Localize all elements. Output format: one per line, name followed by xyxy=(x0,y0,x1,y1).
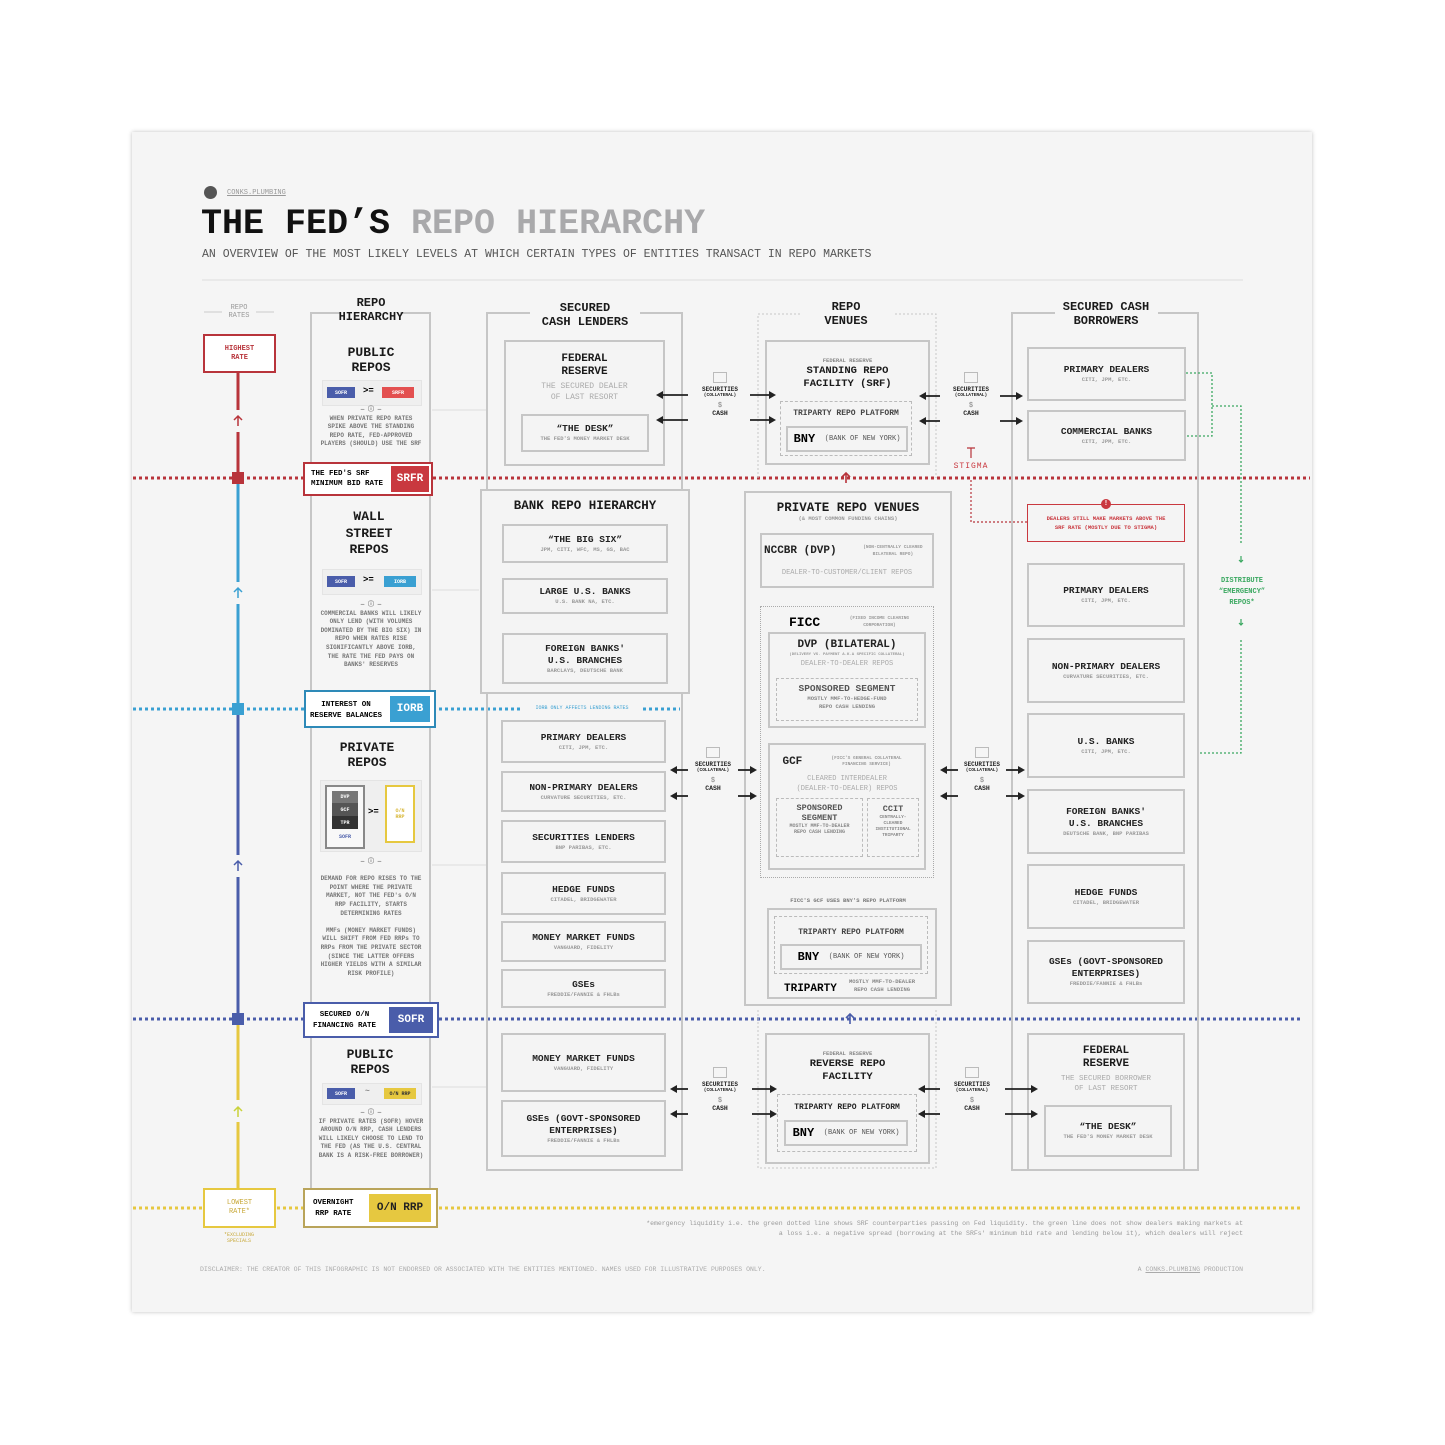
chips stack: GCF xyxy=(340,806,350,812)
GCF to BNY connector xyxy=(846,866,850,920)
disclaimer: DISCLAIMER: THE CREATOR OF THIS INFOGRAPHIC IS NOT ENDORSED OR ASSOCIATED WITH THE ENTITIES MENTIONED. NAMES USED FOR ILLUSTRATIVE PURPOSES ONLY. xyxy=(200,1266,766,1273)
bank repo hierarchy panel: LARGE U.S. BANKS xyxy=(539,586,631,597)
borrowers list: OF LAST RESORT xyxy=(1074,1085,1138,1093)
IORB note: IORB ONLY AFFECTS LENDING RATES xyxy=(535,705,628,711)
rate box: IORB: IORB xyxy=(397,703,423,715)
note private repos: DEMAND FOR REPO RISES TO THE POINT WHERE THE PRIVATE MARKET, NOT THE FED's O/N RRP FACILITY, STARTS DETERMINING RATES xyxy=(321,875,421,917)
lenders list: ENTERPRISES) xyxy=(549,1124,618,1136)
triparty: BNY xyxy=(798,950,819,964)
lender: federal reserve xyxy=(504,340,665,466)
wall street repos: WALL xyxy=(353,509,385,524)
chips SOFR >= SRFR xyxy=(322,380,422,406)
bank repo hierarchy panel xyxy=(480,489,690,694)
chips stack: TPR xyxy=(340,820,350,826)
borrowers list: RESERVE xyxy=(1083,1058,1129,1070)
secured cash borrowers heading: BORROWERS xyxy=(1074,314,1138,328)
wall street repos: STREET xyxy=(346,526,392,540)
borrowers list: CURVATURE SECURITIES, ETC. xyxy=(1063,672,1149,680)
text: $ xyxy=(980,777,984,785)
FICC: MOSTLY MMF-TO-HEDGE-FUND xyxy=(807,695,887,702)
highest rate box xyxy=(203,334,276,373)
triparty: (BANK OF NEW YORK) xyxy=(829,953,904,961)
venue: SRF: (BANK OF NEW YORK) xyxy=(825,435,900,443)
private repo venues panel xyxy=(744,491,952,1006)
public repos bottom: PUBLIC xyxy=(347,1047,393,1062)
distribute emergency repos label: “EMERGENCY” xyxy=(1219,588,1265,596)
lenders list: VANGUARD, FIDELITY xyxy=(554,1064,613,1072)
FICC: REPO CASH LENDING xyxy=(794,829,845,835)
FICC: TRIPARTY xyxy=(882,833,904,838)
heading xyxy=(339,296,404,324)
lowest rate box: RATE* xyxy=(229,1208,250,1216)
note private repos: MMFs (MONEY MARKET FUNDS) WILL SHIFT FROM FED RRPs TO RRPs FROM THE PRIVATE SECTOR (SINCE THE LATTER OFFERS HIGHER YIELDS WITH A SIMILAR RISK PROFILE) xyxy=(321,927,421,977)
rate axis xyxy=(232,372,244,1188)
secured cash borrowers heading: SECURED CASH xyxy=(1063,300,1149,314)
FICC: GCF xyxy=(782,756,802,768)
bank repo hierarchy panel: FOREIGN BANKS' xyxy=(545,642,625,654)
rate box: SOFR: SOFR xyxy=(398,1014,424,1026)
header: logo xyxy=(204,186,286,199)
distribute emergency repos label: REPOS* xyxy=(1229,599,1255,607)
bank repo hierarchy panel: U.S. BRANCHES xyxy=(548,654,622,666)
column outlines xyxy=(311,313,1198,1190)
text: CASH xyxy=(712,1105,728,1112)
faint connectors xyxy=(432,410,486,1087)
lenders list: CURVATURE SECURITIES, ETC. xyxy=(541,794,626,800)
wall street repos: REPOS xyxy=(349,542,388,557)
repo hierarchy column xyxy=(318,296,424,1159)
chips SOFR ~ RRP: O/N RRP xyxy=(389,1090,410,1096)
text: (COLLATERAL) xyxy=(956,1088,988,1093)
borrowers list: CITI, JPM, ETC. xyxy=(1082,376,1131,383)
distribute emergency repos label: DISTRIBUTE xyxy=(1221,577,1263,585)
private repo venues panel: FICC'S GCF USES BNY'S REPO PLATFORM xyxy=(790,897,906,904)
rate box: O/N RRP: OVERNIGHT xyxy=(313,1199,354,1207)
header: logo: CONKS.PLUMBING xyxy=(227,189,286,197)
text: $ xyxy=(970,1097,974,1105)
FICC: REPO CASH LENDING xyxy=(819,703,875,710)
borrowers list: FOREIGN BANKS' xyxy=(1066,806,1146,816)
lenders list: VANGUARD, FIDELITY xyxy=(554,944,613,950)
FICC: (FIXED INCOME CLEARING CORPORATION) xyxy=(850,616,909,628)
public repos top xyxy=(348,345,394,375)
private repo venues panel: PRIVATE REPO VENUES xyxy=(777,501,919,515)
FICC: CENTRALLY- xyxy=(879,815,906,820)
text: (COLLATERAL) xyxy=(955,393,987,398)
venue: SRF: STANDING REPO xyxy=(807,365,888,377)
FICC: (DEALER-TO-DEALER) REPOS xyxy=(797,785,897,793)
text: CASH xyxy=(964,1105,980,1112)
FICC: CCIT xyxy=(883,804,903,814)
O/N RRP line xyxy=(133,1206,1300,1210)
lender: federal reserve: “THE DESK” xyxy=(556,423,614,434)
borrowers list: ENTERPRISES) xyxy=(1072,968,1140,979)
distribute emergency repos label xyxy=(1219,577,1265,607)
highest rate box: HIGHEST xyxy=(225,344,254,352)
NCCBR: (NON-CENTRALLY CLEARED BILATERAL REPO) xyxy=(863,545,923,557)
rate box: O/N RRP: RRP RATE xyxy=(315,1210,351,1218)
subtitle: AN OVERVIEW OF THE MOST LIKELY LEVELS AT WHICH CERTAIN TYPES OF ENTITIES TRANSACT IN REPO MARKETS xyxy=(202,248,871,261)
rate box: O/N RRP xyxy=(303,1188,438,1228)
SOFR line xyxy=(133,1018,1300,1020)
FICC: FICC xyxy=(789,614,820,630)
note wall street: COMMERCIAL BANKS WILL LIKELY ONLY LEND (WITH VOLUMES DOMINATED BY THE BIG SIX) IN REPO WHEN RATES RISE SIGNIFICANTLY ABOVE IORB, THE RATE THE FED PAYS ON BANKS' RESERVES xyxy=(321,610,421,668)
borrowers list: DEUTSCHE BANK, BNP PARIBAS xyxy=(1063,830,1149,836)
rate box: SRFR xyxy=(303,462,433,496)
rate box: SRFR: MINIMUM BID RATE xyxy=(311,480,383,488)
chips stack: >= xyxy=(368,807,379,817)
rate box: SRFR: THE FED'S SRF xyxy=(311,470,370,478)
venue: SRF xyxy=(765,340,930,465)
lenders list: GSEs xyxy=(572,978,595,990)
note private repos: — ⓘ — xyxy=(361,858,381,865)
text: SECURITIES xyxy=(954,1081,990,1088)
bank repo hierarchy panel: BANK REPO HIERARCHY xyxy=(514,499,656,513)
chips SOFR ~ RRP: ~ xyxy=(365,1087,370,1096)
public repos bottom: REPOS xyxy=(350,1062,390,1077)
chips SOFR >= IORB: >= xyxy=(363,575,374,585)
borrowers list: U.S. BANKS xyxy=(1077,736,1134,746)
rate column header xyxy=(228,304,250,320)
secured cash lenders heading xyxy=(542,301,628,329)
lenders list: CITADEL, BRIDGEWATER xyxy=(550,896,616,902)
rate box: SOFR: FINANCING RATE xyxy=(313,1022,376,1030)
borrowers list xyxy=(1027,347,1186,1169)
highest rate box: RATE xyxy=(231,354,248,362)
private repo venues panel: (& MOST COMMON FUNDING CHAINS) xyxy=(798,515,898,522)
venue: RRP: FEDERAL RESERVE xyxy=(823,1050,872,1057)
borrowers list: THE FED'S MONEY MARKET DESK xyxy=(1063,1133,1153,1140)
rate box: IORB: INTEREST ON xyxy=(321,701,371,709)
text: SECURITIES xyxy=(953,386,989,393)
lender: federal reserve: OF LAST RESORT xyxy=(551,393,618,402)
rate box: IORB: RESERVE BALANCES xyxy=(310,712,382,720)
lenders list: FREDDIE/FANNIE & FHLBs xyxy=(547,990,620,998)
venue: SRF: TRIPARTY REPO PLATFORM xyxy=(793,409,899,418)
lenders list: FREDDIE/FANNIE & FHLBs xyxy=(547,1136,620,1144)
chips stack: DVP xyxy=(340,794,350,800)
text: CASH xyxy=(974,785,990,792)
transfer labels: $ xyxy=(718,402,722,410)
venue: RRP xyxy=(765,1033,930,1164)
venue: SRF: BNY xyxy=(794,432,815,446)
note public repos: WHEN PRIVATE REPO RATES SPIKE ABOVE THE STANDING REPO RATE, FED-APPROVED PLAYERS (SHOULD) USE THE SRF xyxy=(321,415,421,447)
heading: HIERARCHY xyxy=(339,310,403,324)
NCCBR xyxy=(760,533,934,588)
bank repo hierarchy panel: BARCLAYS, DEUTSCHE BANK xyxy=(547,666,623,674)
NCCBR: DEALER-TO-CUSTOMER/CLIENT REPOS xyxy=(782,569,912,577)
borrowers list: HEDGE FUNDS xyxy=(1075,886,1137,898)
triparty: TRIPARTY xyxy=(784,983,837,995)
footnote: *emergency liquidity i.e. the green dotted line shows SRF counterparties passing on Fed liquidity. the green line does not show dealers making markets at a loss i.e. a negative spread (borrowing at the SRFs' minimum bid rate and lending below it), which dealers will reject xyxy=(646,1220,1243,1237)
borrowers list: ! xyxy=(1104,500,1108,508)
chips SOFR >= SRFR: SRFR xyxy=(392,390,404,396)
lowest rate box: LOWEST xyxy=(227,1199,252,1207)
public repos bottom xyxy=(347,1047,393,1077)
borrowers list: SRF RATE (MOSTLY DUE TO STIGMA) xyxy=(1055,524,1157,531)
lenders list xyxy=(501,720,666,1157)
private repos: REPOS xyxy=(347,755,386,770)
borrowers list: DEALERS STILL MAKE MARKETS ABOVE THE xyxy=(1047,515,1165,522)
text: SECURITIES xyxy=(964,761,1000,768)
chips stack xyxy=(320,780,422,852)
chips SOFR >= SRFR: >= xyxy=(363,386,374,396)
repo venues heading xyxy=(824,300,868,328)
transfer labels: SECURITIES xyxy=(702,386,738,393)
borrowers list: GSEs (GOVT-SPONSORED xyxy=(1049,956,1163,967)
lenders list: SECURITIES LENDERS xyxy=(532,832,635,842)
borrowers list: THE SECURED BORROWER xyxy=(1061,1075,1151,1083)
venue: RRP: (BANK OF NEW YORK) xyxy=(824,1129,899,1137)
chips SOFR ~ RRP xyxy=(322,1083,422,1105)
transfer labels: (COLLATERAL) xyxy=(704,393,736,398)
text: (COLLATERAL) xyxy=(966,768,998,773)
bank repo hierarchy panel: “THE BIG SIX” xyxy=(548,534,622,544)
FICC: (FICC'S GENERAL COLLATERAL FINANCING SERVICE) xyxy=(831,756,902,767)
borrowers list: PRIMARY DEALERS xyxy=(1063,585,1149,596)
lenders list: MONEY MARKET FUNDS xyxy=(532,932,635,942)
secured cash lenders heading: CASH LENDERS xyxy=(542,315,628,329)
heading: REPO xyxy=(357,296,385,310)
secured cash borrowers heading xyxy=(1063,300,1149,328)
chips stack: RRP xyxy=(395,814,404,820)
stigma connector xyxy=(967,448,1027,522)
rate box: SOFR: SECURED O/N xyxy=(320,1011,369,1019)
borrowers list: U.S. BRANCHES xyxy=(1069,818,1143,828)
FICC: INSTITUTIONAL xyxy=(875,827,911,832)
transfer labels xyxy=(702,372,738,417)
note public repos bottom: — ⓘ — xyxy=(361,1109,381,1116)
borrowers list: CITI, JPM, ETC. xyxy=(1081,597,1131,604)
excluding specials note xyxy=(224,1232,254,1244)
FICC: MOSTLY MMF-TO-DEALER xyxy=(789,823,850,829)
text: $ xyxy=(718,1097,722,1105)
lender: federal reserve: THE FED'S MONEY MARKET DESK xyxy=(540,435,630,442)
title: THE FED’S REPO HIERARCHY xyxy=(201,204,705,244)
rate box: O/N RRP: O/N RRP xyxy=(377,1202,423,1214)
secured cash lenders heading: SECURED xyxy=(560,301,610,315)
rate box: SRFR: SRFR xyxy=(397,473,423,485)
public repos top: PUBLIC xyxy=(348,345,394,360)
FICC: DVP (BILATERAL) xyxy=(797,639,897,651)
text: (COLLATERAL) xyxy=(697,768,729,773)
transfer labels: CASH xyxy=(712,410,728,417)
excluding specials note: SPECIALS xyxy=(227,1238,251,1244)
wall street repos xyxy=(346,509,392,557)
borrowers list: CITI, JPM, ETC. xyxy=(1081,748,1131,754)
FICC xyxy=(760,606,934,878)
NCCBR: NCCBR (DVP) xyxy=(764,545,837,557)
venue: RRP: REVERSE REPO xyxy=(810,1058,885,1070)
text: CASH xyxy=(963,410,979,417)
borrowers list: “THE DESK” xyxy=(1079,1121,1136,1132)
borrowers list: CITADEL, BRIDGEWATER xyxy=(1073,898,1139,906)
text: CASH xyxy=(705,785,721,792)
text: $ xyxy=(711,777,715,785)
chips SOFR >= IORB: SOFR xyxy=(335,578,347,584)
venue: RRP: BNY xyxy=(793,1126,814,1140)
venue: SRF: FACILITY (SRF) xyxy=(803,378,892,390)
chips stack: O/N xyxy=(395,808,404,814)
chips SOFR >= IORB xyxy=(322,569,422,595)
venue: SRF: FEDERAL RESERVE xyxy=(823,357,872,364)
FICC: SPONSORED xyxy=(797,803,842,813)
lenders list: PRIMARY DEALERS xyxy=(541,732,626,742)
text: (COLLATERAL) xyxy=(704,1088,736,1093)
repo rates bracket xyxy=(204,311,274,313)
green emergency distribution line xyxy=(1186,373,1241,753)
chips SOFR ~ RRP: SOFR xyxy=(335,1090,347,1096)
triparty: REPO CASH LENDING xyxy=(854,986,910,993)
private repos: PRIVATE xyxy=(340,740,394,755)
triparty xyxy=(767,908,937,999)
triparty: MOSTLY MMF-TO-DEALER xyxy=(849,978,915,985)
note private repos xyxy=(321,857,422,977)
repo venues heading: VENUES xyxy=(824,314,868,328)
lender: federal reserve: THE SECURED DEALER xyxy=(541,382,628,391)
text: SECURITIES xyxy=(695,761,731,768)
note wall street: — ⓘ — xyxy=(361,601,381,608)
venue: RRP: TRIPARTY REPO PLATFORM xyxy=(794,1103,900,1112)
lenders list: CITI, JPM, ETC. xyxy=(559,744,608,750)
borrowers list: COMMERCIAL BANKS xyxy=(1061,426,1152,436)
lenders list: BNP PARIBAS, ETC. xyxy=(555,844,612,850)
borrowers list: CITI, JPM, ETC. xyxy=(1082,438,1131,444)
excluding specials note: *EXCLUDING xyxy=(224,1232,254,1238)
borrowers list: FREDDIE/FANNIE & FHLBs xyxy=(1070,980,1142,987)
stigma label: STIGMA xyxy=(954,462,988,471)
note public repos: — ⓘ — xyxy=(361,406,381,413)
text: SECURITIES xyxy=(702,1081,738,1088)
up arrows on threshold lines xyxy=(842,473,850,483)
chips SOFR >= IORB: IORB xyxy=(394,578,406,584)
lenders list: GSEs (GOVT-SPONSORED xyxy=(526,1112,641,1124)
bank repo hierarchy panel: JPM, CITI, WFC, MS, GS, BAC xyxy=(540,546,630,552)
blue IORB line xyxy=(133,708,680,710)
red threshold line xyxy=(133,476,1310,480)
lenders list: HEDGE FUNDS xyxy=(552,884,615,894)
lenders list: MONEY MARKET FUNDS xyxy=(532,1052,635,1064)
borrowers list: FEDERAL xyxy=(1083,1045,1129,1057)
chips SOFR >= SRFR: SOFR xyxy=(335,390,347,396)
FICC: SPONSORED SEGMENT xyxy=(799,683,895,694)
FICC: CLEARED INTERDEALER xyxy=(807,775,887,783)
public repos top: REPOS xyxy=(351,360,390,375)
bank repo hierarchy panel: U.S. BANK NA, ETC. xyxy=(555,598,615,605)
rate column header: REPO xyxy=(231,304,247,312)
private repos xyxy=(340,740,394,770)
lenders list: NON-PRIMARY DEALERS xyxy=(529,782,638,792)
borrowers list: PRIMARY DEALERS xyxy=(1064,364,1149,375)
FICC: SEGMENT xyxy=(802,813,837,823)
rate box: IORB xyxy=(304,690,436,728)
FICC: (DELIVERY VS. PAYMENT A.K.A SPECIFIC COLLATERAL) xyxy=(789,653,905,657)
lender: federal reserve: RESERVE xyxy=(561,366,608,378)
lender: federal reserve: FEDERAL xyxy=(561,353,608,365)
rate box: SOFR xyxy=(303,1002,439,1038)
text: $ xyxy=(969,402,973,410)
lowest rate box xyxy=(203,1188,276,1228)
venue: RRP: FACILITY xyxy=(822,1071,873,1083)
borrowers list: NON-PRIMARY DEALERS xyxy=(1052,660,1160,672)
triparty: TRIPARTY REPO PLATFORM xyxy=(798,928,904,937)
note public repos bottom: IF PRIVATE RATES (SOFR) HOVER AROUND O/N RRP, CASH LENDERS WILL LIKELY CHOOSE TO LEND TO THE FED (AS THE U.S. CENTRAL BANK IS A RISK-FREE BORROWER) xyxy=(319,1118,423,1159)
FICC: CLEARED xyxy=(884,821,902,826)
chips stack: SOFR xyxy=(339,834,351,840)
rate column header: RATES xyxy=(228,312,250,320)
credit: A CONKS.PLUMBING PRODUCTION xyxy=(1138,1266,1243,1273)
poster background xyxy=(132,132,1312,1312)
repo venues heading: REPO xyxy=(832,300,860,314)
FICC: DEALER-TO-DEALER REPOS xyxy=(801,660,893,668)
